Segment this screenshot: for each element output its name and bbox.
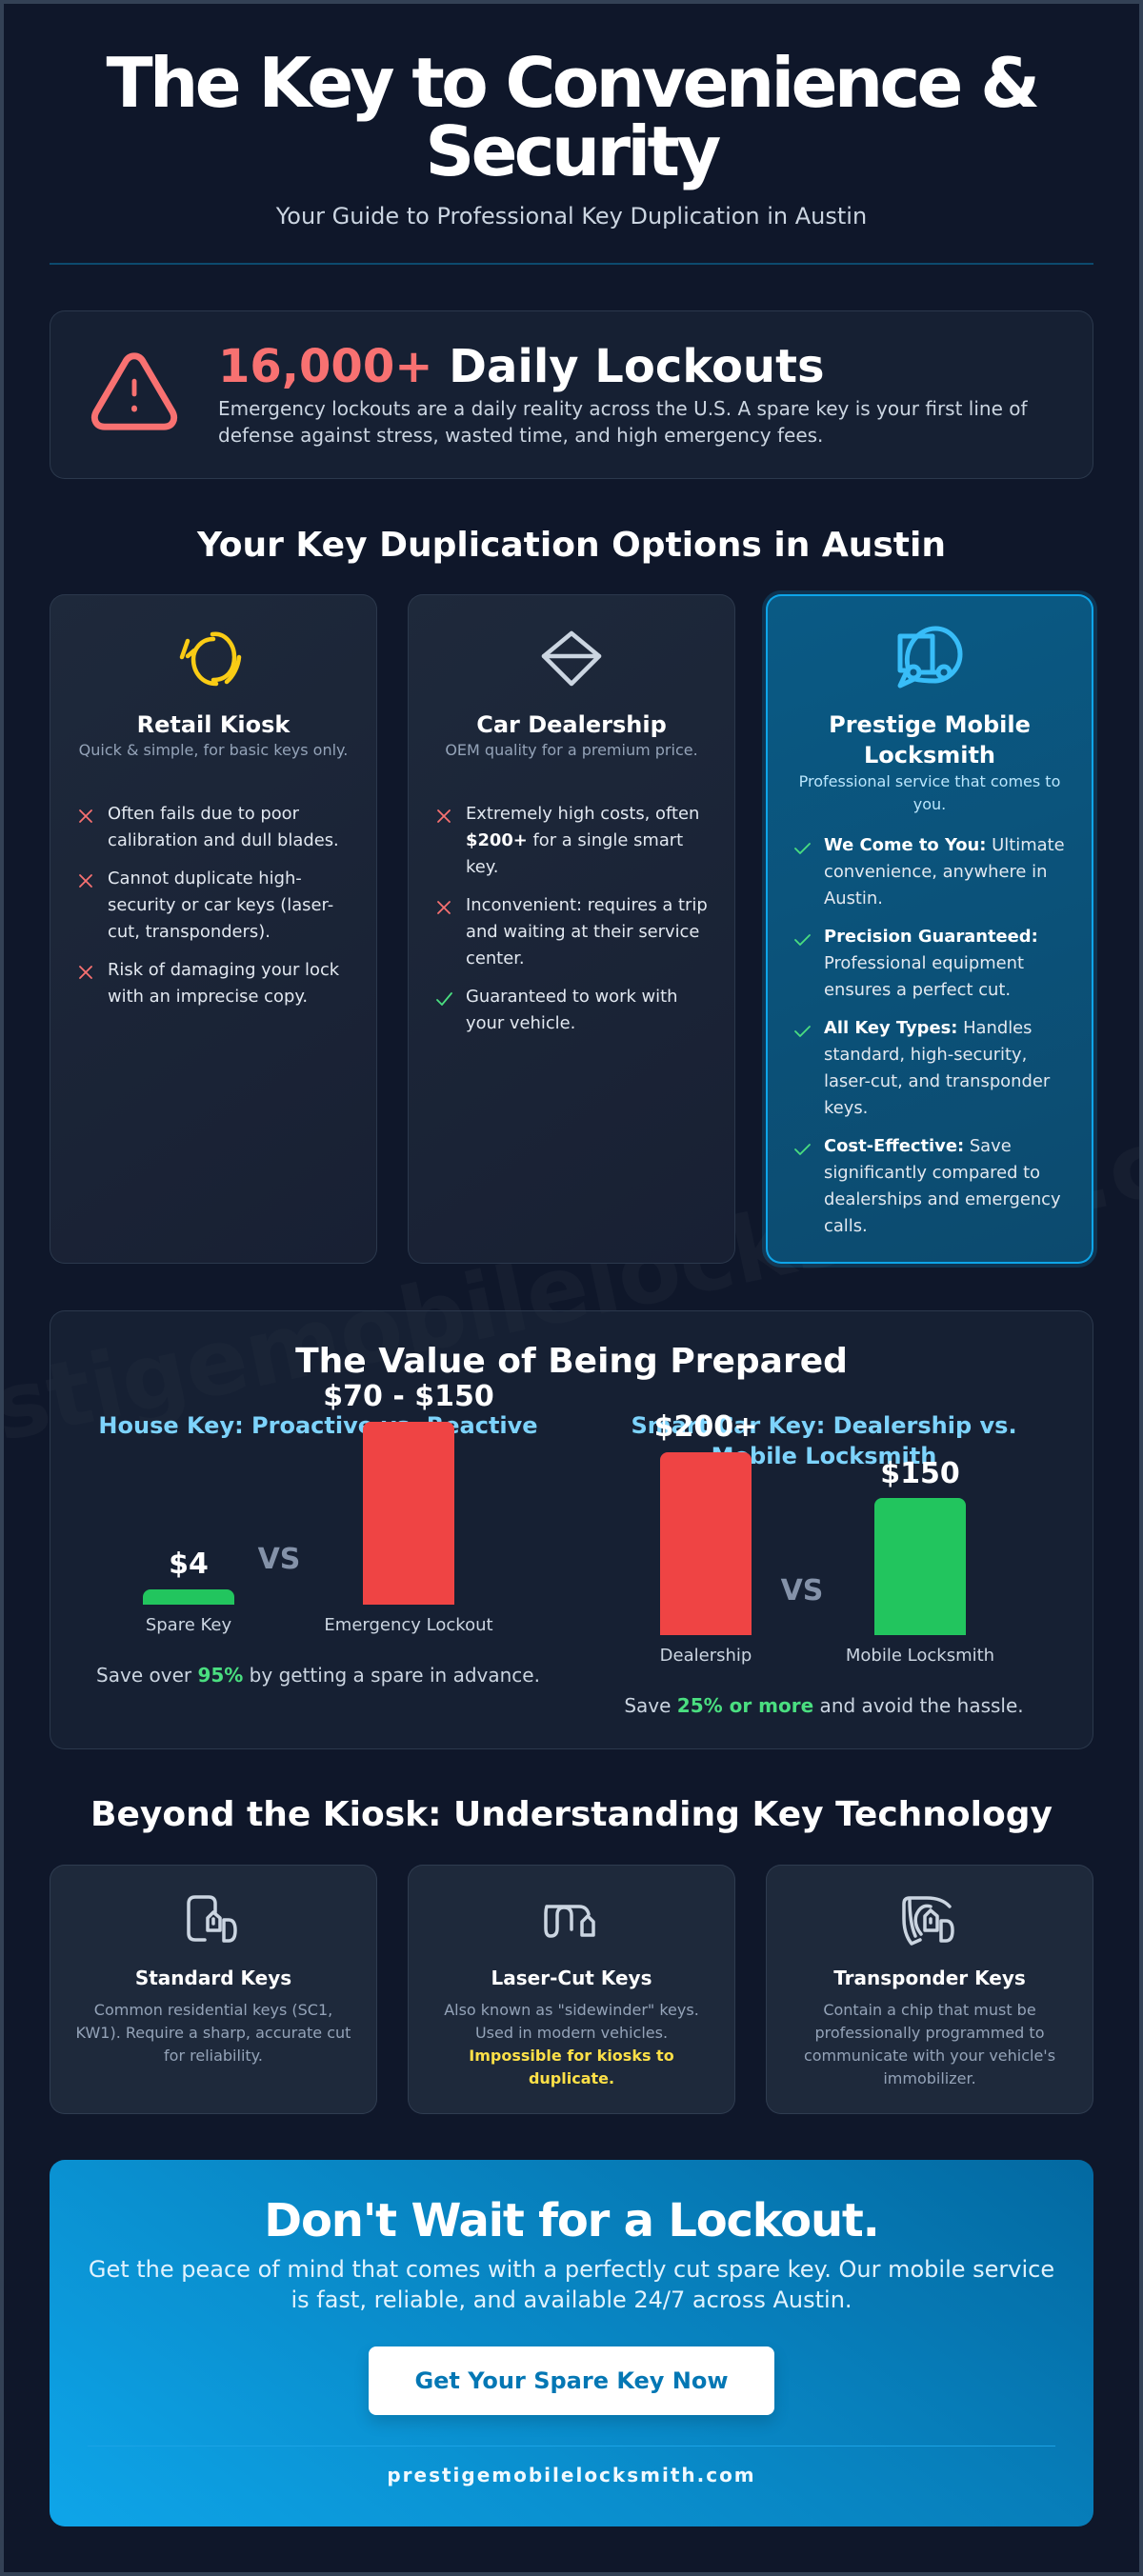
benefit: Guaranteed to work with xyxy=(466,987,677,1007)
website: prestigemobilelocksmith.com xyxy=(387,2464,756,2486)
stat headline: 16,000+ Daily Lockouts xyxy=(218,340,825,393)
card description: immobilizer. xyxy=(883,2069,976,2087)
drawback 3 xyxy=(79,960,339,1007)
card description: duplicate. xyxy=(529,2069,614,2087)
card description: Impossible for kiosks to xyxy=(469,2047,674,2065)
benefit 1: convenience, anywhere in xyxy=(824,862,1047,882)
card description: Also known as "sidewinder" keys. xyxy=(444,2001,699,2019)
vs marker: VS xyxy=(258,1543,300,1576)
card subtitle: you. xyxy=(913,795,946,813)
drawback 1: Often fails due to poor xyxy=(108,804,299,824)
benefit 3: All Key Types: Handles xyxy=(824,1018,1033,1038)
card description: Used in modern vehicles. xyxy=(475,2024,668,2042)
list: dealership points xyxy=(436,804,708,1033)
card description xyxy=(804,2001,1055,2087)
stat description: Emergency lockouts are a daily reality across the U.S. A spare key is your first line of xyxy=(218,397,1028,420)
button label: Get Your Spare Key Now xyxy=(414,2367,729,2394)
cta text xyxy=(89,2256,1054,2313)
header xyxy=(50,43,1093,265)
card description: for reliability. xyxy=(164,2047,263,2065)
card title: Laser-Cut Keys xyxy=(491,1967,652,1989)
card subtitle: Quick & simple, for basic keys only. xyxy=(79,741,348,759)
drawback 2: center. xyxy=(466,949,525,968)
card title: Locksmith xyxy=(864,742,995,769)
drawback 2: Cannot duplicate high- xyxy=(108,869,302,889)
drawback 1: $200+ for a single smart xyxy=(466,830,683,850)
panel: car dealership xyxy=(408,594,735,1264)
chart: house key xyxy=(96,1380,540,1687)
bar: mobile locksmith xyxy=(874,1498,966,1635)
card description xyxy=(444,2001,699,2087)
card title: Retail Kiosk xyxy=(137,711,290,738)
value: spare key: $4 xyxy=(169,1548,209,1581)
benefit 2 xyxy=(794,927,1038,1000)
drawback 3: Risk of damaging your lock xyxy=(108,960,339,980)
chart heading: Mobile Locksmith xyxy=(712,1443,936,1469)
heading: options: Your Key Duplication Options in Austin xyxy=(197,526,946,565)
benefit 2: ensures a perfect cut. xyxy=(824,980,1011,1000)
benefit 3: standard, high-security, xyxy=(824,1045,1027,1065)
chart: smart car key xyxy=(624,1410,1024,1717)
benefit 1: We Come to You: Ultimate xyxy=(824,835,1065,855)
panel: retail kiosk xyxy=(50,594,377,1264)
label: emergency lockout: Emergency Lockout xyxy=(324,1615,493,1635)
label: mobile locksmith: Mobile Locksmith xyxy=(846,1646,994,1666)
drawback 2: Inconvenient: requires a trip xyxy=(466,895,708,915)
benefit 4: Cost-Effective: Save xyxy=(824,1136,1012,1156)
heading: key technology: Beyond the Kiosk: Understanding Key Technology xyxy=(90,1795,1053,1834)
drawback 2: and waiting at their service xyxy=(466,922,699,942)
chart heading: Smart Car Key: Dealership vs. xyxy=(631,1412,1017,1439)
options row xyxy=(50,590,1097,1268)
card title: Car Dealership xyxy=(476,711,667,738)
benefit 4: significantly compared to xyxy=(824,1163,1040,1183)
benefit 4: calls. xyxy=(824,1216,868,1236)
card description xyxy=(76,2001,351,2065)
value: dealership: $200+ xyxy=(654,1410,757,1444)
title: Security xyxy=(425,111,718,191)
card title: Transponder Keys xyxy=(833,1967,1026,1989)
panel: daily lockouts stat xyxy=(50,310,1093,479)
card description: professionally programmed to xyxy=(815,2024,1044,2042)
cta text: is fast, reliable, and available 24/7 across Austin. xyxy=(291,2286,852,2313)
drawback 1: calibration and dull blades. xyxy=(108,830,339,850)
icon: warning triangle xyxy=(91,352,177,430)
benefit xyxy=(436,987,677,1033)
drawback 3: with an imprecise copy. xyxy=(108,987,308,1007)
chart heading: House Key: Proactive vs. Reactive xyxy=(98,1412,538,1439)
card description: Common residential keys (SC1, xyxy=(94,2001,332,2019)
bar: dealership xyxy=(660,1452,752,1635)
drawback 1: Extremely high costs, often xyxy=(466,804,699,824)
bar: emergency lockout xyxy=(363,1422,454,1605)
drawback 2 xyxy=(79,869,333,942)
bar: spare key xyxy=(143,1589,234,1605)
panel heading: The Value of Being Prepared xyxy=(295,1342,848,1381)
list: mobile benefits xyxy=(794,835,1065,1236)
card subtitle: OEM quality for a premium price. xyxy=(445,741,698,759)
panel: prestige mobile locksmith xyxy=(766,594,1093,1264)
icon: retail kiosk refresh xyxy=(179,632,242,686)
list: kiosk drawbacks xyxy=(79,804,339,1007)
benefit 1: Austin. xyxy=(824,889,883,909)
benefit 2: Professional equipment xyxy=(824,953,1024,973)
card description: KW1). Require a sharp, accurate cut xyxy=(76,2024,351,2042)
card description: Contain a chip that must be xyxy=(823,2001,1036,2019)
drawback 2: cut, transponders). xyxy=(108,922,271,942)
icon: mobile truck xyxy=(897,627,962,688)
benefit 3: laser-cut, and transponder xyxy=(824,1071,1050,1091)
panel: transponder keys xyxy=(766,1865,1093,2114)
benefit 3 xyxy=(794,1018,1050,1118)
label: dealership: Dealership xyxy=(660,1646,752,1666)
value: emergency lockout: $70 - $150 xyxy=(323,1380,494,1413)
title: The Key to Convenience & xyxy=(107,43,1036,123)
benefit 4 xyxy=(794,1136,1061,1236)
panel: standard keys xyxy=(50,1865,377,2114)
drawback 1 xyxy=(79,804,339,850)
chart heading xyxy=(631,1412,1017,1469)
card title xyxy=(829,711,1031,769)
vs marker: VS xyxy=(781,1574,823,1608)
benefit 4: dealerships and emergency xyxy=(824,1189,1061,1209)
card subtitle: Professional service that comes to xyxy=(799,772,1060,790)
benefit 3: keys. xyxy=(824,1098,868,1118)
benefit 1 xyxy=(794,835,1065,909)
card title: Prestige Mobile xyxy=(829,711,1031,738)
card description: communicate with your vehicle's xyxy=(804,2047,1055,2065)
card subtitle xyxy=(799,772,1060,813)
icon: dealership diamond xyxy=(541,630,602,686)
savings note: Save 25% or more and avoid the hassle. xyxy=(624,1694,1024,1717)
header divider xyxy=(50,263,1093,265)
icon: transponder key xyxy=(902,1896,954,1946)
title xyxy=(107,43,1037,191)
cta button xyxy=(369,2346,774,2415)
drawback 1: key. xyxy=(466,857,498,877)
panel: call to action xyxy=(50,2160,1093,2526)
benefit: your vehicle. xyxy=(466,1013,575,1033)
drawback 2 xyxy=(437,895,708,968)
panel: value of being prepared xyxy=(50,1310,1093,1749)
value: mobile locksmith: $150 xyxy=(880,1457,960,1490)
stat description xyxy=(218,397,1028,447)
cta heading: Don't Wait for a Lockout. xyxy=(264,2194,879,2247)
label: spare key: Spare Key xyxy=(146,1615,231,1635)
drawback 2: security or car keys (laser- xyxy=(108,895,333,915)
savings note: Save over 95% by getting a spare in advance. xyxy=(96,1664,540,1687)
key technology row xyxy=(50,1865,1093,2114)
cta text: Get the peace of mind that comes with a perfectly cut spare key. Our mobile service xyxy=(89,2256,1054,2283)
panel: laser-cut keys xyxy=(408,1865,735,2114)
drawback 1 xyxy=(437,804,699,877)
benefit 2: Precision Guaranteed: xyxy=(824,927,1038,947)
icon: laser-cut key xyxy=(544,1905,595,1938)
subtitle: Your Guide to Professional Key Duplication in Austin xyxy=(276,203,867,230)
stat description: defense against stress, wasted time, and high emergency fees. xyxy=(218,424,823,447)
card title: Standard Keys xyxy=(135,1967,291,1989)
icon: standard key xyxy=(187,1895,237,1943)
